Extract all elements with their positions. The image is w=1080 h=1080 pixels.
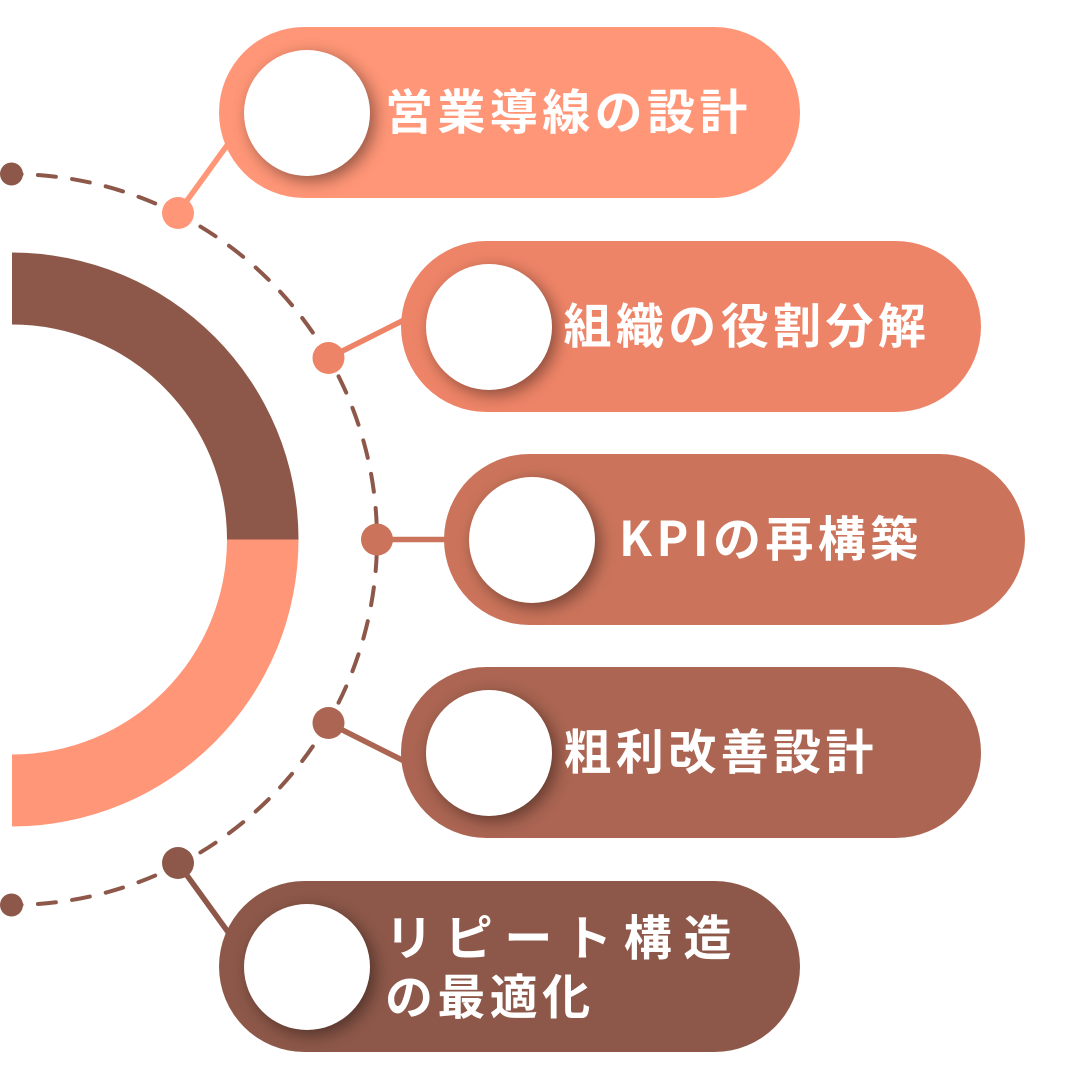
panel: 組織の役割分解: [400, 240, 981, 412]
panel: KPIの再構築: [444, 454, 1025, 625]
connector 3: [361, 524, 447, 556]
label: 営業導線の設計: [385, 73, 752, 143]
panel: リピート構造の最適化: [219, 880, 800, 1052]
icon circle: [426, 690, 552, 816]
panel: 粗利改善設計: [400, 667, 981, 838]
label: の最適化: [385, 958, 595, 1028]
icon circle: [469, 477, 595, 603]
connector 5: [162, 847, 228, 932]
half ring: upper dark segment: [12, 252, 298, 540]
label: [385, 899, 743, 1028]
icon circle: [244, 904, 370, 1030]
label: 粗利改善設計: [564, 713, 878, 783]
icon circle: [426, 264, 552, 390]
label: KPIの再構築: [619, 500, 923, 570]
label: 組織の役割分解: [564, 286, 930, 356]
orbit end dot: top: [0, 162, 23, 186]
panel: 営業導線の設計: [219, 27, 800, 198]
half ring: lower orange segment: [12, 540, 298, 826]
connector 2: [312, 320, 404, 374]
connector 1: [162, 144, 228, 229]
connector 4: [312, 707, 404, 761]
icon circle: [244, 50, 370, 176]
orbit end dot: bottom: [0, 894, 23, 916]
label: リピート構造: [385, 899, 743, 969]
dashed orbit: [12, 174, 377, 905]
